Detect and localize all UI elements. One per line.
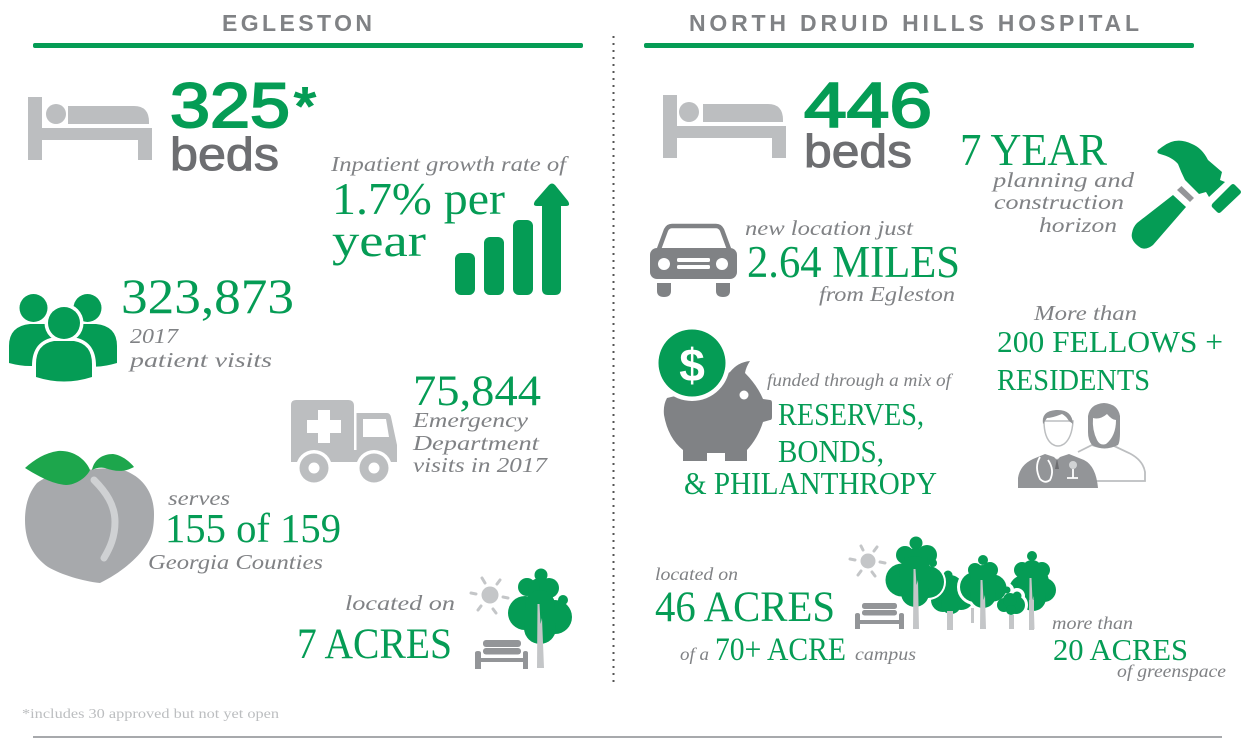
icon: park with sun, tree and bench: [471, 568, 572, 669]
stat: 323,873 patient visits: 2017: [130, 324, 180, 348]
stat: 200 fellows and residents: [997, 301, 1223, 397]
stat: 200 fellows and residents: RESIDENTS: [997, 362, 1150, 397]
stat: 323,873 patient visits: [121, 268, 294, 372]
stat: 323,873 patient visits: patient visits: [127, 348, 272, 372]
icon: bed: [663, 95, 786, 158]
stat: 20 acres greenspace: [1052, 613, 1226, 681]
text: inpatient growth rate: [330, 152, 570, 266]
icon: bed: [28, 97, 152, 160]
icon: rising bar chart with arrow: [455, 184, 569, 295]
stat: 75,844 emergency visits: visits in 2017: [413, 453, 549, 477]
heading: North Druid Hills Hospital: [644, 10, 1194, 48]
text: inpatient growth rate: Inpatient growth rate of: [330, 152, 570, 176]
heading: Egleston: [33, 10, 583, 48]
stat: 20 acres greenspace: of greenspace: [1117, 661, 1226, 681]
stat: 46 acres: 46 ACRES: [655, 584, 835, 631]
icon: patient group: [9, 294, 117, 386]
stat: 325 beds: [170, 71, 316, 180]
stat: funding mix: funded through a mix of: [767, 370, 954, 390]
icon: ambulance: [291, 400, 397, 486]
stat: 7 acres: located on: [345, 591, 455, 615]
icon: piggy bank with coin: $: [679, 339, 705, 391]
stat: 446 beds: [804, 71, 932, 177]
stat: funding mix: RESERVES,: [778, 396, 924, 432]
stat: 7 year horizon: construction: [994, 190, 1124, 214]
stat: 323,873 patient visits: 323,873: [121, 268, 294, 324]
heading: Egleston: EGLESTON: [222, 10, 372, 36]
stat: 75,844 emergency visits: 75,844: [413, 368, 541, 415]
stat: 46 acres: [655, 564, 916, 668]
stat: 446 beds: beds: [804, 125, 912, 177]
stat: funding mix: & PHILANTHROPY: [684, 465, 937, 501]
stat: 2.64 miles: from Egleston: [819, 282, 955, 306]
text: inpatient growth rate: year: [332, 216, 426, 266]
panel: Egleston: [9, 10, 583, 722]
stat: 7 year horizon: horizon: [1039, 213, 1117, 237]
stat: 75,844 emergency visits: Emergency: [412, 408, 529, 432]
stat: 325 beds: *: [294, 78, 316, 136]
stat: 7 acres: [297, 591, 455, 668]
front trees: [885, 536, 1026, 615]
icon: doctors: [1018, 403, 1145, 488]
stat: 155 of 159 counties: [148, 486, 341, 574]
stat: 46 acres: campus: [855, 644, 916, 664]
stat: 446 beds: 446: [804, 71, 932, 141]
stat: 7 acres: 7 ACRES: [297, 621, 452, 668]
stat: 46 acres: located on: [655, 564, 738, 584]
icon: trees with sun and bench: [850, 536, 1056, 630]
stat: funding mix: BONDS,: [778, 433, 884, 469]
stat: 155 of 159 counties: serves: [168, 486, 230, 510]
stat: 155 of 159 counties: Georgia Counties: [148, 550, 323, 574]
icon: peach: [25, 451, 154, 583]
stat: funding mix: [684, 370, 954, 501]
stat: 20 acres greenspace: more than: [1052, 613, 1133, 633]
stat: 75,844 emergency visits: Department: [412, 431, 540, 455]
stat: 2.64 miles: [745, 216, 960, 306]
stat: 2.64 miles: 2.64 MILES: [747, 237, 960, 287]
stat: 200 fellows and residents: 200 FELLOWS +: [997, 324, 1223, 359]
stat: 155 of 159 counties: 155 of 159: [165, 505, 341, 551]
back trees: [931, 551, 1056, 630]
stat: 7 year horizon: planning and: [990, 168, 1135, 192]
footnote: *includes 30 approved but not yet open: [22, 707, 279, 722]
stat: 200 fellows and residents: More than: [1033, 301, 1137, 325]
stat: 46 acres: of a: [680, 644, 709, 664]
icon: piggy bank with coin: [654, 325, 772, 461]
icon: hammer: [1132, 141, 1241, 249]
panel: North Druid Hills Hospital: [644, 10, 1241, 681]
stat: 7 year horizon: [960, 124, 1135, 237]
stat: 2.64 miles: new location just: [745, 216, 914, 240]
heading: North Druid Hills Hospital: NORTH DRUID HILLS HOSPITAL: [689, 10, 1139, 36]
stat: 75,844 emergency visits: [412, 368, 549, 477]
icon: car: [650, 226, 737, 297]
stat: 325 beds: 325: [170, 71, 290, 141]
stat: 325 beds: beds: [170, 128, 279, 180]
stat: 20 acres greenspace: 20 ACRES: [1053, 632, 1188, 667]
stat: 46 acres: 70+ ACRE: [715, 632, 846, 668]
stat: 7 year horizon: 7 YEAR: [960, 124, 1107, 175]
text: inpatient growth rate: 1.7% per: [332, 174, 505, 224]
